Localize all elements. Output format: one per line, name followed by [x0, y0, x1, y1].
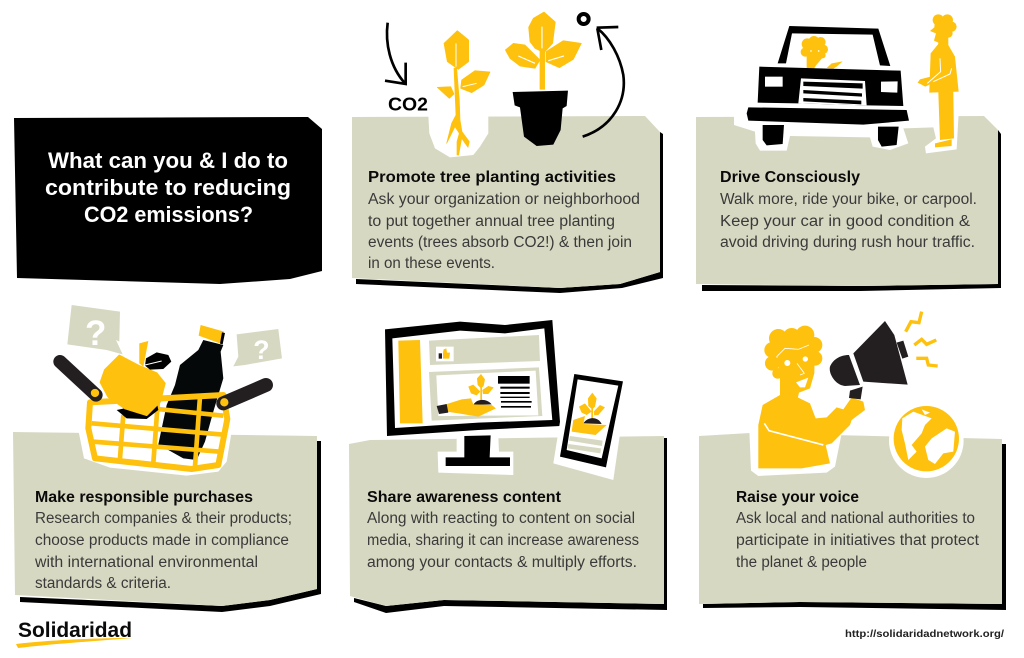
illustration: car and person	[734, 14, 959, 153]
text: raise your voice: Ask local and national authorities to	[736, 510, 975, 527]
apple	[101, 341, 171, 419]
heading: responsible purchases: Make responsible purchases	[35, 489, 253, 506]
text: tree planting: in on these events.	[368, 255, 495, 272]
heading: share awareness: Share awareness content	[367, 489, 561, 506]
car	[747, 26, 909, 147]
speech bubble left: ?	[85, 314, 106, 353]
speech bubble left	[67, 305, 123, 354]
person standing	[918, 14, 959, 147]
title text: What can you & I do to	[48, 148, 288, 173]
text: share awareness	[367, 510, 639, 571]
speech bubble right: ?	[253, 335, 270, 365]
text: drive consciously: Keep your car in good condition &	[720, 213, 971, 230]
footer url: http://solidaridadnetwork.org/	[845, 628, 1004, 640]
text: share awareness: Along with reacting to content on social	[367, 510, 635, 527]
illustration: monitor and phone	[385, 320, 628, 480]
text: share awareness: media, sharing it can increase awareness	[367, 532, 639, 549]
panel: tree planting	[352, 12, 663, 293]
panel: share awareness	[349, 320, 667, 613]
text: responsible purchases: Research companies & their products;	[35, 510, 292, 527]
text: raise your voice: the planet & people	[736, 554, 867, 571]
title panel	[14, 117, 322, 284]
text: responsible purchases: with international environmental	[34, 554, 258, 571]
basket	[88, 395, 227, 469]
text: tree planting	[368, 191, 640, 272]
illustration: shopping basket	[60, 305, 282, 476]
label: CO2: CO2	[388, 94, 428, 115]
text: share awareness: among your contacts & multiply efforts.	[367, 554, 637, 571]
bottle	[158, 325, 225, 460]
text: raise your voice: participate in initiatives that protect	[736, 532, 980, 549]
text: tree planting: to put together annual tree planting	[368, 213, 615, 230]
basket handles	[60, 362, 266, 407]
illustration: person with megaphone and globe	[749, 312, 964, 478]
sound waves	[906, 312, 938, 366]
panel: drive consciously	[696, 14, 1001, 291]
text: responsible purchases: choose products made in compliance	[35, 532, 289, 549]
title text: contribute to reducing	[45, 175, 291, 200]
heading: raise your voice: Raise your voice	[736, 489, 859, 506]
text: responsible purchases: standards & criteria.	[35, 575, 171, 592]
monitor	[385, 320, 560, 466]
phone	[553, 370, 628, 480]
text: drive consciously: Walk more, ride your bike, or carpool.	[720, 191, 977, 208]
heading: tree planting: Promote tree planting activities	[368, 169, 616, 186]
potted plant	[505, 12, 581, 146]
text: tree planting: Ask your organization or neighborhood	[368, 191, 640, 208]
title text	[45, 148, 291, 227]
logo: Solidaridad: Solidaridad	[18, 619, 132, 642]
panel: raise your voice	[699, 312, 1006, 610]
driver	[801, 36, 843, 69]
small plant	[437, 31, 490, 155]
text: drive consciously	[720, 191, 977, 251]
person	[758, 326, 865, 468]
screen plant and hand	[437, 374, 496, 417]
title text: CO2 emissions?	[84, 202, 253, 227]
text: drive consciously: avoid driving during rush hour traffic.	[720, 234, 975, 251]
panel: responsible purchases	[13, 305, 321, 612]
arrow: oxygen released	[583, 27, 624, 137]
text: raise your voice	[736, 510, 980, 571]
globe	[894, 406, 959, 471]
arrow: CO2 absorbed	[385, 23, 406, 84]
oxygen label	[579, 14, 589, 24]
megaphone	[830, 321, 908, 399]
text: tree planting: events (trees absorb CO2!) & then join	[368, 234, 632, 251]
illustration: plants and CO2 cycle	[385, 12, 624, 157]
heading: drive consciously: Drive Consciously	[720, 169, 860, 186]
speech bubble right	[233, 329, 282, 366]
text: responsible purchases	[34, 510, 292, 592]
